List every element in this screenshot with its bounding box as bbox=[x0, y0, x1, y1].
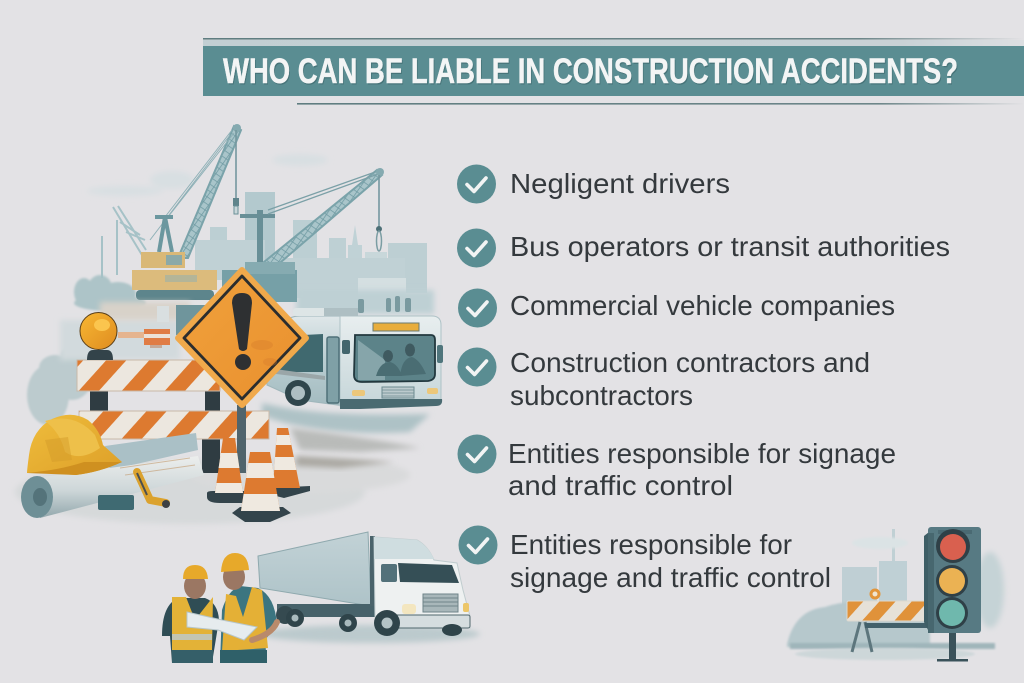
crane right bbox=[222, 168, 384, 302]
worker right bbox=[220, 553, 277, 663]
workers bbox=[162, 553, 277, 663]
traffic light bbox=[924, 527, 981, 662]
item 3: Commercial vehicle companies bbox=[510, 290, 895, 321]
crane left bbox=[132, 124, 241, 300]
distant people bbox=[358, 296, 411, 313]
small barrier bbox=[847, 590, 930, 652]
misty clouds bbox=[87, 154, 328, 196]
item 4: subcontractors bbox=[510, 380, 693, 411]
item 5: and traffic control bbox=[508, 470, 733, 501]
item 2 bbox=[457, 228, 950, 268]
item 1: Negligent drivers bbox=[510, 168, 730, 199]
bus bbox=[267, 308, 443, 409]
worker left bbox=[162, 565, 219, 663]
road and distant work zone bbox=[60, 302, 216, 360]
distant crane bbox=[102, 206, 146, 278]
warning sign bbox=[178, 270, 306, 473]
yellow tool bbox=[137, 472, 170, 508]
truck shadow bbox=[260, 625, 480, 643]
ground bbox=[15, 403, 430, 524]
item 5: Entities responsible for signage bbox=[508, 438, 896, 469]
item 3 bbox=[458, 288, 895, 328]
exclamation mark bbox=[232, 293, 252, 351]
item 6: Entities responsible for bbox=[510, 529, 792, 560]
item 5 bbox=[458, 434, 896, 501]
foliage left bbox=[27, 346, 92, 425]
warning lamp bbox=[80, 312, 117, 360]
checklist bbox=[457, 164, 950, 593]
upper rail bbox=[77, 360, 220, 391]
item 2: Bus operators or transit authorities bbox=[510, 231, 950, 262]
title banner bbox=[203, 38, 1024, 105]
traffic light scene bbox=[787, 527, 1004, 662]
cab bbox=[374, 537, 470, 628]
truck bbox=[258, 532, 480, 643]
pipes and blueprints bbox=[21, 433, 204, 518]
trailer wheels bbox=[276, 606, 357, 632]
scene background bbox=[787, 529, 1004, 660]
item 6 bbox=[458, 526, 831, 593]
trailer bbox=[258, 532, 371, 606]
cone back right bbox=[270, 428, 310, 498]
main construction illustration bbox=[15, 124, 443, 524]
barricade bbox=[77, 360, 269, 473]
item 4: Construction contractors and bbox=[510, 347, 870, 378]
bus side bbox=[267, 316, 345, 406]
item 1 bbox=[457, 164, 730, 204]
barricade legs bbox=[90, 391, 220, 473]
hard hat bbox=[27, 415, 122, 475]
traffic cones bbox=[207, 428, 310, 522]
item 4 bbox=[458, 347, 870, 411]
item 6: signage and traffic control bbox=[510, 562, 831, 593]
foliage behind crane bbox=[74, 275, 146, 311]
distant skyline bbox=[195, 192, 434, 314]
cone front bbox=[232, 452, 291, 522]
blueprint held by workers bbox=[187, 612, 257, 640]
cone back left bbox=[207, 438, 245, 503]
lower rail bbox=[79, 411, 269, 439]
bus front bbox=[340, 316, 441, 406]
